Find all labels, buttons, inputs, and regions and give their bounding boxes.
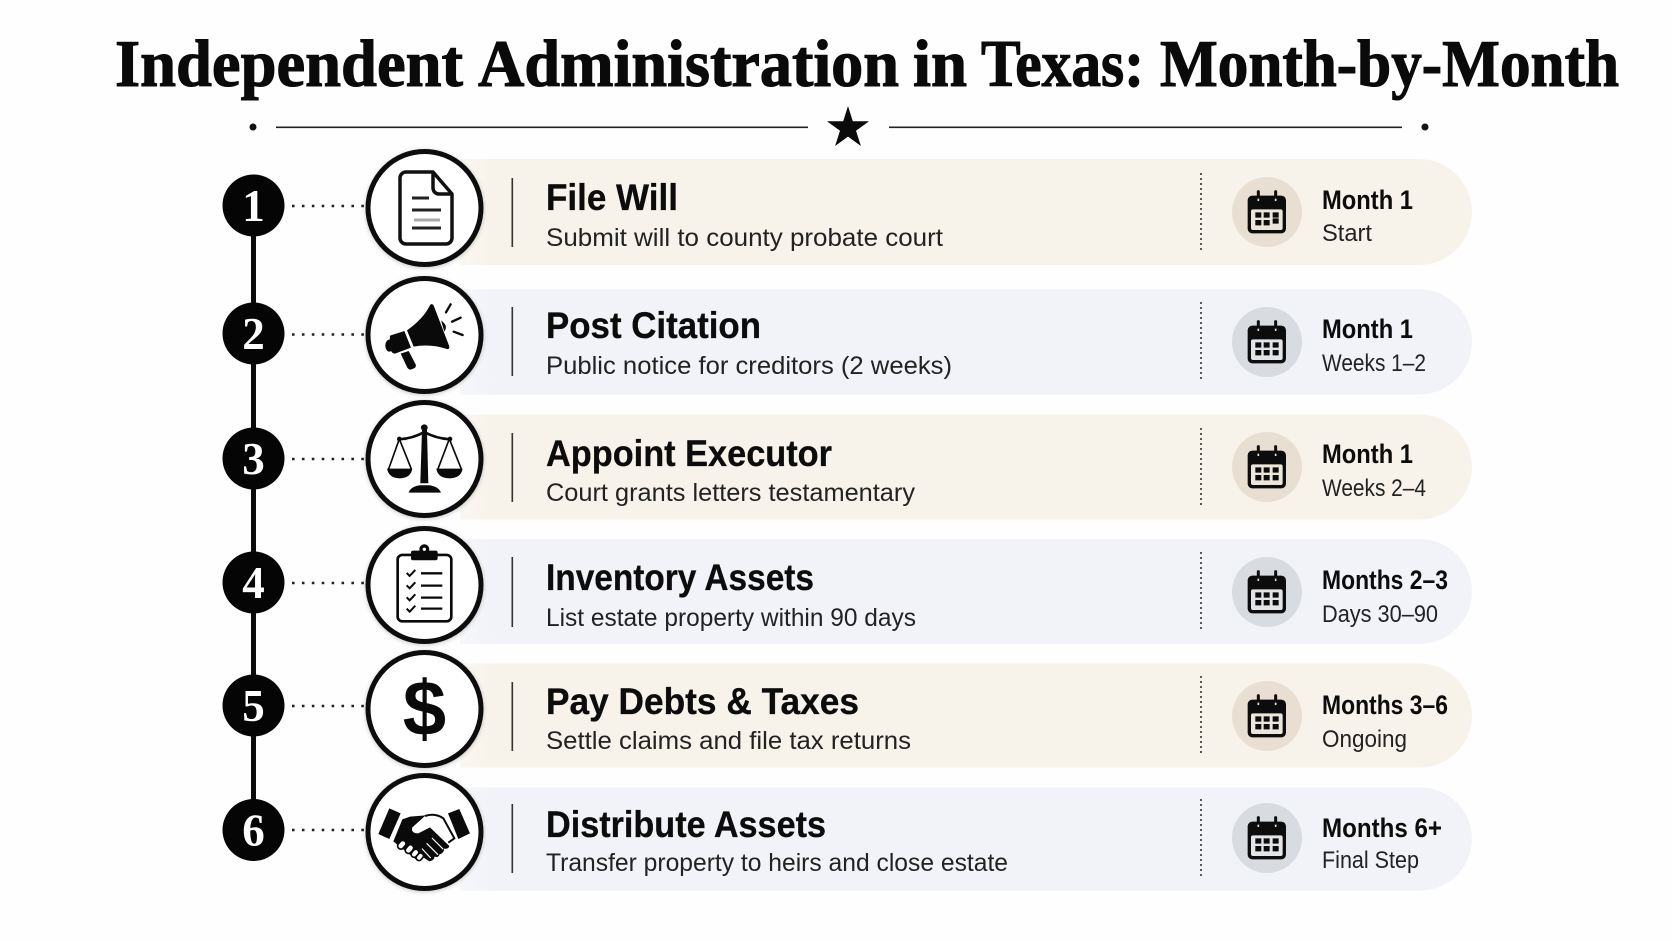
dotted divider 3	[1200, 428, 1202, 507]
title divider with star	[250, 106, 1428, 146]
icon: checklist clipboard	[368, 528, 481, 642]
dotted divider 4	[1200, 552, 1202, 631]
dotted divider 2	[1200, 302, 1202, 382]
divider 1	[512, 178, 513, 247]
connector 4	[292, 582, 364, 584]
number 4: 4	[242, 558, 265, 608]
timing 5: Months 3–6	[1322, 690, 1448, 720]
heading 3: Appoint Executor	[546, 433, 832, 474]
divider 4	[512, 557, 513, 627]
divider 3	[512, 433, 513, 502]
timing 1	[1322, 185, 1413, 247]
description 2: Public notice for creditors (2 weeks)	[546, 352, 952, 380]
timing 2: Weeks 1–2	[1322, 350, 1426, 377]
panel: step 2 band	[460, 290, 1472, 394]
timing 4: Months 2–3	[1322, 565, 1448, 595]
timing 3: Month 1	[1322, 439, 1413, 469]
timing 3: Weeks 2–4	[1322, 475, 1426, 502]
description 5: Settle claims and file tax returns	[546, 727, 911, 755]
timing 4: Days 30–90	[1322, 601, 1438, 628]
icon: calendar 3	[1232, 432, 1302, 502]
icon: calendar 4	[1232, 557, 1302, 627]
timing 5: Ongoing	[1322, 726, 1407, 753]
title: Texas:	[981, 27, 1144, 101]
description 1: Submit will to county probate court	[546, 224, 943, 252]
heading 6: Distribute Assets	[546, 804, 826, 845]
timing 1: Start	[1322, 220, 1372, 247]
title: Independent	[115, 27, 464, 101]
number 3	[222, 428, 284, 490]
dotted divider 5	[1200, 676, 1202, 755]
number 3: 3	[242, 434, 265, 484]
number 6: 6	[242, 806, 265, 856]
panel: step 3 band	[460, 414, 1472, 520]
number 5: 5	[242, 681, 265, 731]
panel: step 4 band	[460, 539, 1472, 644]
heading 4: Inventory Assets	[546, 557, 814, 598]
connector 6	[292, 829, 364, 831]
connector 3	[292, 458, 364, 460]
step 3: Appoint Executor	[222, 402, 1472, 520]
timing 2: Month 1	[1322, 314, 1413, 344]
dotted divider 6	[1200, 799, 1202, 878]
number 1	[222, 174, 284, 236]
timing 6: Final Step	[1322, 847, 1419, 874]
title: Month-by-Month	[1160, 27, 1619, 101]
step 6: Distribute Assets	[222, 776, 1472, 890]
number 1: 1	[242, 181, 265, 231]
timing 6: Months 6+	[1322, 813, 1442, 843]
icon: megaphone	[368, 278, 481, 392]
heading 5: Pay Debts & Taxes	[546, 681, 859, 722]
divider 2	[512, 307, 513, 376]
step 5: Pay Debts & Taxes	[222, 652, 1472, 768]
icon: document	[368, 152, 481, 264]
icon: dollar sign: $	[403, 664, 446, 752]
title	[115, 27, 1619, 101]
icon: calendar 2	[1232, 307, 1302, 377]
step 1: File Will	[222, 152, 1472, 265]
number 6	[222, 799, 284, 861]
timing 4	[1322, 565, 1448, 628]
step 2: Post Citation	[222, 278, 1472, 394]
icon: calendar 5	[1232, 681, 1302, 751]
description 6: Transfer property to heirs and close estate	[546, 849, 1008, 877]
icon: dollar sign	[368, 652, 481, 766]
description 4: List estate property within 90 days	[546, 604, 916, 632]
heading 2: Post Citation	[546, 305, 761, 346]
number 4	[222, 552, 284, 614]
timing 1: Month 1	[1322, 185, 1413, 215]
timing 6	[1322, 813, 1442, 874]
dotted divider 1	[1200, 173, 1202, 252]
timeline spine	[251, 205, 256, 829]
heading 1: File Will	[546, 177, 678, 218]
step 4: Inventory Assets	[222, 528, 1472, 644]
panel: step 6 band	[460, 788, 1472, 890]
panel: step 1 band	[460, 159, 1472, 265]
panel: step 5 band	[460, 664, 1472, 768]
title: in	[913, 27, 967, 101]
icon: calendar 6	[1232, 803, 1302, 873]
timing 5	[1322, 690, 1448, 753]
icon: scales of justice	[368, 402, 481, 516]
divider 6	[512, 804, 513, 873]
number 2	[222, 302, 284, 364]
timing 2	[1322, 314, 1426, 377]
connector 5	[292, 705, 364, 707]
description 3: Court grants letters testamentary	[546, 479, 915, 507]
icon: handshake	[368, 776, 481, 888]
number 2: 2	[242, 309, 265, 359]
connector 1	[292, 205, 364, 207]
number 5	[222, 674, 284, 736]
title: Administration	[478, 27, 899, 101]
timing 3	[1322, 439, 1426, 502]
connector 2	[292, 333, 364, 336]
divider 5	[512, 682, 513, 751]
icon: calendar 1	[1232, 177, 1302, 247]
